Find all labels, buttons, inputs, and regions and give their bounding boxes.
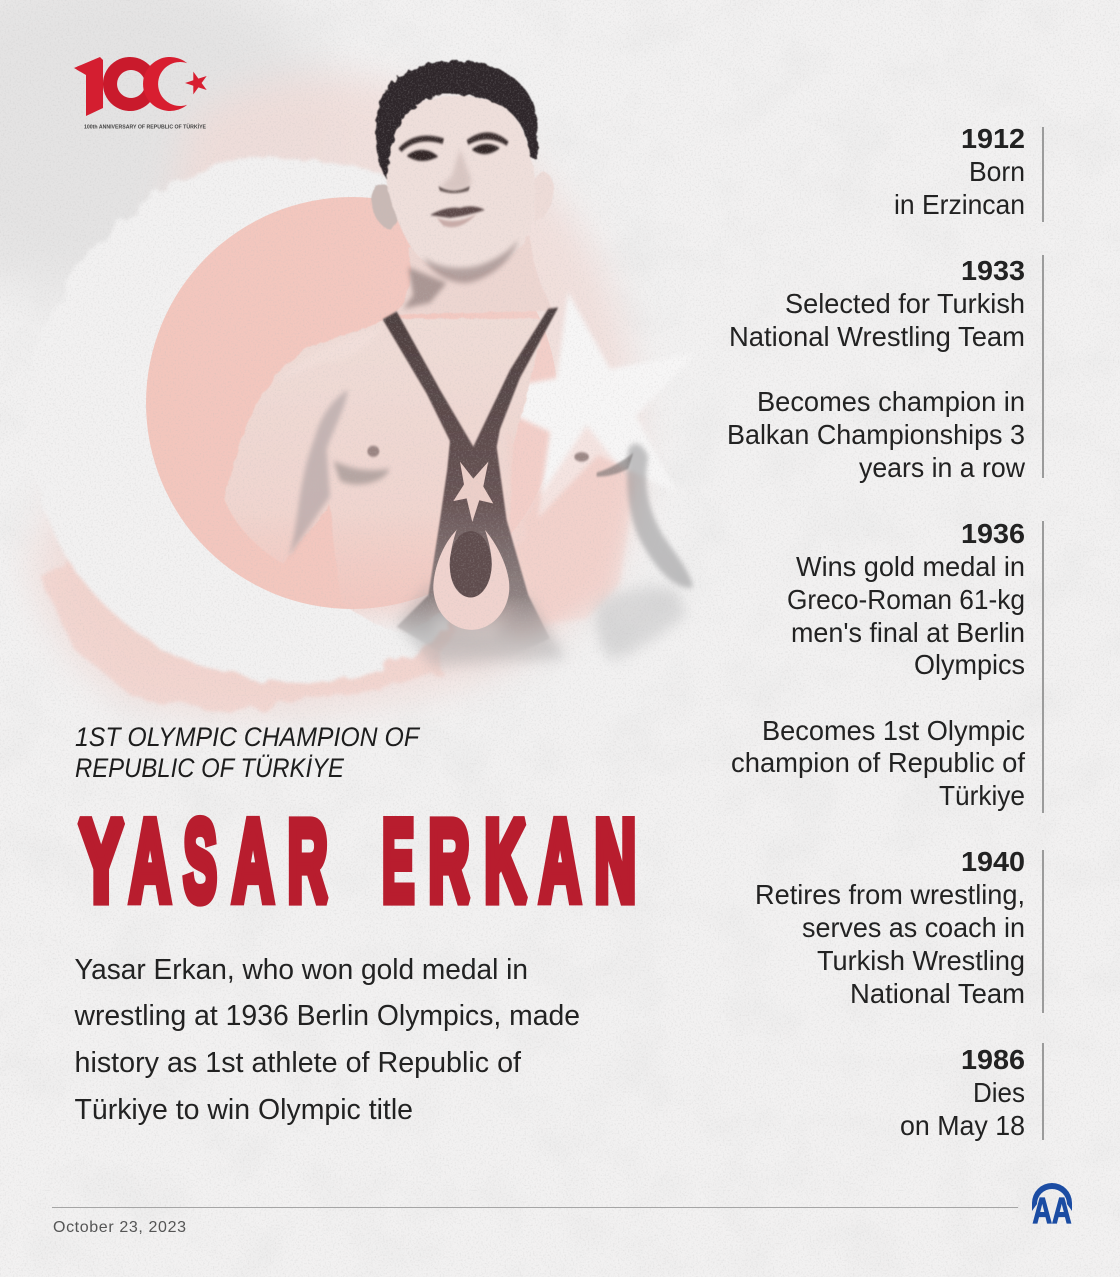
right nipple — [574, 452, 589, 462]
inner red disc — [146, 197, 558, 609]
subtitle: REPUBLIC OF TÜRKİYE — [75, 753, 345, 783]
logo caption: 100th ANNIVERSARY OF REPUBLIC OF TÜRKİYE — [84, 124, 206, 130]
left nipple — [367, 446, 379, 457]
face — [386, 95, 535, 276]
timeline entry: 1940: Retires from wrestling, — [755, 879, 1025, 910]
singlet oval — [450, 531, 492, 597]
timeline entry: 1933: Balkan Championships 3 — [727, 419, 1025, 450]
title: name: R — [428, 798, 470, 926]
timeline entry: 1936: Greco-Roman 61-kg — [787, 584, 1025, 615]
timeline entry: 1912 — [894, 123, 1044, 222]
nostrils — [438, 186, 470, 193]
footer — [52, 1183, 1072, 1236]
singlet — [383, 308, 558, 658]
timeline entry: 1940: National Team — [850, 978, 1025, 1009]
timeline entry: 1936 — [731, 518, 1044, 813]
pink on the right chest — [507, 425, 633, 623]
title: name: A — [540, 798, 581, 926]
timeline entry: 1933: years in a row — [859, 452, 1026, 483]
agency logo — [1032, 1183, 1072, 1231]
intro paragraph: wrestling at 1936 Berlin Olympics, made — [74, 1000, 580, 1032]
timeline entry: 1986: 1986 — [961, 1044, 1025, 1075]
singlet star — [453, 462, 493, 522]
neck shadow — [403, 267, 447, 309]
timeline entry: 1933: Becomes champion in — [757, 386, 1025, 417]
title: name: S — [184, 797, 217, 925]
nose — [440, 149, 472, 192]
timeline entry: 1936: Becomes 1st Olympic — [762, 715, 1025, 746]
timeline entry: 1936: champion of Republic of — [731, 747, 1025, 778]
timeline entry: 1933: 1933 — [961, 255, 1025, 286]
timeline entry: 1986: on May 18 — [900, 1110, 1025, 1141]
right eyebrow — [467, 132, 509, 146]
timeline entry: 1933 — [727, 255, 1044, 483]
intro paragraph: Yasar Erkan, who won gold medal in — [74, 954, 528, 986]
title: name: N — [594, 798, 636, 926]
star — [185, 72, 207, 94]
white crescent — [28, 158, 552, 682]
logo letters: AA — [1032, 1190, 1072, 1231]
logo arch — [1032, 1183, 1072, 1211]
right arm shadow — [627, 444, 693, 588]
timeline entry: 1912: Born — [969, 156, 1025, 187]
flag backdrop: faded red field, white crescent, star — [28, 76, 696, 714]
arm shading — [288, 390, 348, 558]
title: name: A — [232, 798, 274, 926]
lower right pink wash — [480, 420, 635, 640]
logo: 100th anniversary — [74, 57, 207, 128]
timeline entry: 1936: Türkiye — [939, 780, 1025, 811]
left eye — [407, 150, 438, 161]
title: name: R — [288, 797, 328, 926]
crescent — [143, 57, 187, 111]
pectoral shading — [333, 461, 390, 484]
timeline entry: 1933: National Wrestling Team — [729, 321, 1025, 352]
timeline — [727, 123, 1044, 1141]
intro paragraph: history as 1st athlete of Republic of — [74, 1047, 522, 1079]
lower lip — [437, 214, 477, 227]
timeline entry: 1936: men's final at Berlin — [791, 617, 1025, 648]
title: name: E — [382, 796, 414, 925]
timeline entry: 1936: Wins gold medal in — [796, 551, 1025, 582]
timeline entry: 1986: Dies — [973, 1077, 1025, 1108]
right chest crease — [597, 453, 633, 477]
subtitle: 1ST OLYMPIC CHAMPION OF — [75, 722, 420, 752]
title: name: Y — [79, 797, 124, 925]
first zero — [103, 57, 157, 111]
timeline entry: 1912: 1912 — [961, 123, 1025, 154]
timeline entry: 1940: Turkish Wrestling — [817, 945, 1025, 976]
lower right shadow — [595, 587, 687, 658]
arm and chest — [225, 319, 547, 635]
subtitle — [75, 722, 420, 783]
jaw shadow — [423, 240, 518, 283]
singlet crescent — [433, 530, 509, 630]
shoulder light marks — [277, 326, 383, 382]
timeline entry: 1940 — [755, 846, 1044, 1013]
ear left — [371, 184, 398, 230]
title: name: K — [484, 798, 526, 926]
left eyebrow — [398, 136, 444, 152]
intro paragraph — [74, 954, 580, 1126]
title: name — [79, 796, 636, 926]
timeline entry: 1936: Olympics — [914, 649, 1025, 680]
timeline entry: 1940: serves as coach in — [802, 912, 1025, 943]
flag field — [30, 76, 638, 714]
mouth — [430, 206, 485, 218]
portrait of Yasar Erkan — [225, 60, 693, 666]
lower left brush splash — [40, 560, 460, 712]
white star — [470, 292, 696, 518]
title: name: A — [130, 798, 171, 926]
timeline entry: 1986 — [900, 1043, 1044, 1141]
bottom shadow — [397, 579, 567, 666]
hair — [375, 60, 538, 178]
neck — [393, 236, 553, 315]
timeline entry: 1940: 1940 — [961, 846, 1025, 877]
timeline entry: 1933: Selected for Turkish — [785, 288, 1025, 319]
timeline entry: 1912: in Erzincan — [894, 189, 1025, 220]
date: October 23, 2023 — [53, 1219, 186, 1236]
intro paragraph: Türkiye to win Olympic title — [74, 1094, 413, 1126]
ear right — [533, 172, 554, 222]
timeline entry: 1936: 1936 — [961, 518, 1025, 549]
right eye — [472, 144, 500, 154]
